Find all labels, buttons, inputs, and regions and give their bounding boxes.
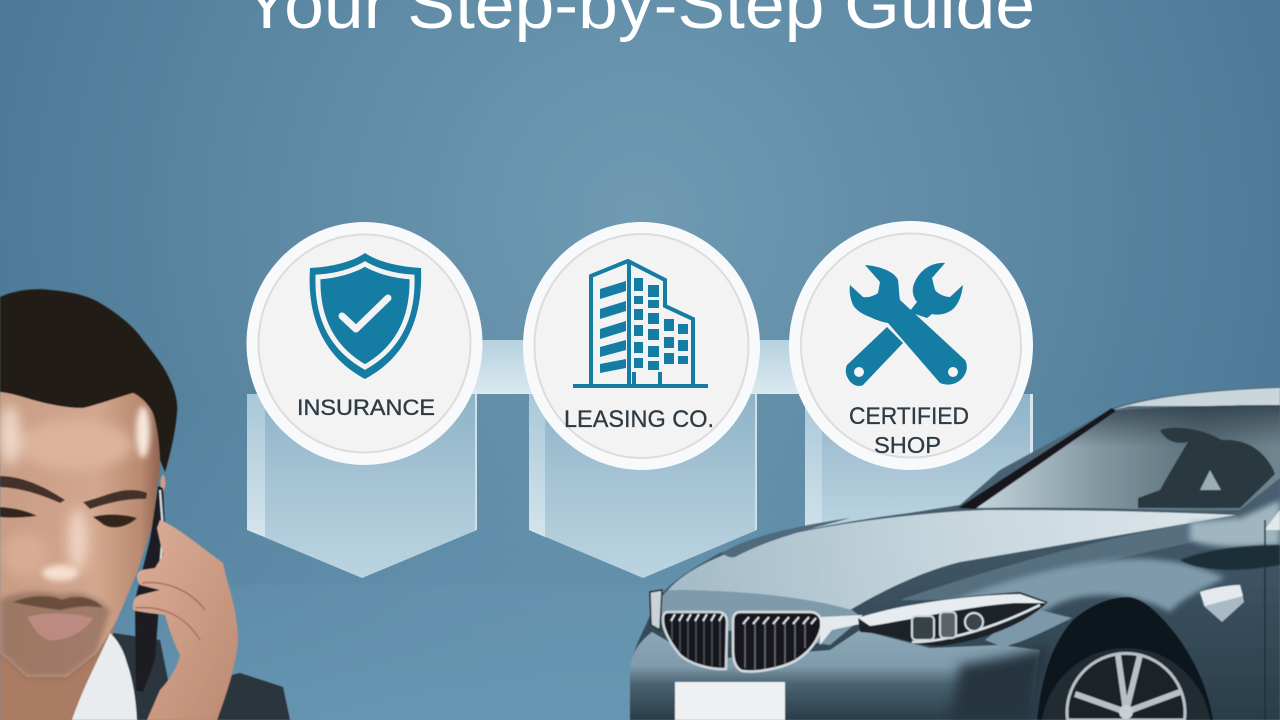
hair <box>0 289 177 472</box>
side indicator <box>1200 585 1244 622</box>
bumper right shade <box>950 645 1050 720</box>
circle: certified shop <box>789 221 1033 470</box>
panel: certified shop card <box>805 394 1033 545</box>
connectors between circles <box>470 340 810 394</box>
car body <box>630 387 1280 720</box>
neck <box>0 625 115 720</box>
wheel arch <box>1037 597 1213 720</box>
icon: office building <box>573 261 708 388</box>
door streak <box>1180 545 1280 570</box>
headlight <box>858 592 1048 646</box>
man on phone <box>0 289 290 720</box>
hood crease <box>722 518 850 557</box>
mouth <box>27 613 93 640</box>
chrome strip <box>820 615 862 645</box>
eyes <box>0 507 37 518</box>
hood <box>668 510 1236 610</box>
a-pillar <box>958 408 1116 509</box>
right grille <box>733 612 821 672</box>
left grille <box>663 612 727 669</box>
ear <box>160 475 166 491</box>
phone <box>135 486 165 692</box>
licence plate <box>675 682 785 720</box>
label: shop: SHOP <box>874 432 941 458</box>
circle: leasing company <box>523 222 760 470</box>
fender lamp patch <box>985 610 1072 647</box>
face highlights <box>0 405 133 577</box>
label: certified: CERTIFIED <box>849 403 969 430</box>
door seam <box>1264 520 1266 720</box>
fender highlight <box>945 559 1225 625</box>
windshield <box>973 405 1280 511</box>
face <box>0 385 160 677</box>
label: insurance: INSURANCE <box>297 395 435 420</box>
nose panel <box>652 590 862 645</box>
roof <box>1113 388 1280 410</box>
panel: insurance card <box>247 394 477 578</box>
panel: leasing card <box>529 394 757 578</box>
driver silhouette <box>1138 428 1275 508</box>
door highlight <box>1190 500 1280 547</box>
jacket <box>95 633 290 720</box>
label: leasing company: LEASING CO. <box>564 406 714 433</box>
car <box>630 387 1280 720</box>
icon: shield with check <box>310 253 421 379</box>
hand <box>133 520 238 720</box>
corner lamp <box>650 590 662 630</box>
windshield top shade <box>1060 405 1280 447</box>
moustache <box>13 596 103 610</box>
wheel <box>1042 648 1210 720</box>
stubble <box>0 592 110 677</box>
circle: insurance <box>246 222 482 465</box>
icon: crossed wrenches <box>846 263 967 386</box>
eyebrows <box>0 476 65 503</box>
upper hood shadow band <box>900 516 1240 600</box>
mirror trim <box>1266 510 1280 530</box>
bumper <box>630 630 1040 720</box>
shirt collar <box>72 633 137 720</box>
